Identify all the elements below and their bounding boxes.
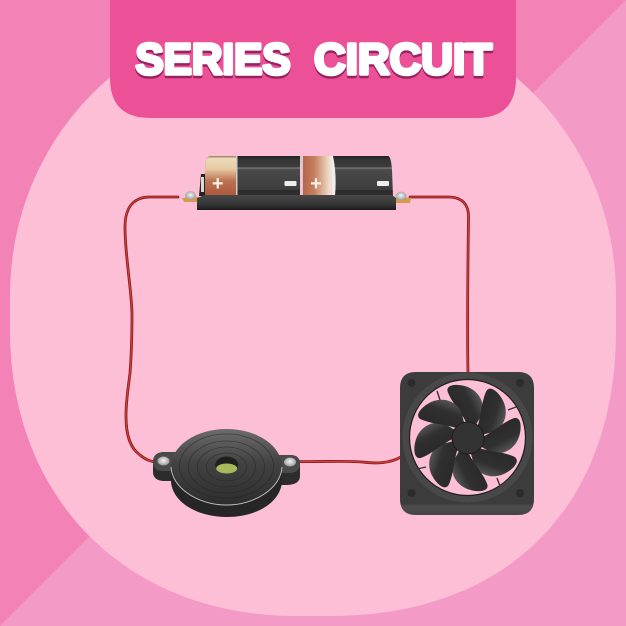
minus sign bbox=[377, 181, 389, 186]
fan frame bbox=[400, 372, 534, 515]
minus sign bbox=[284, 181, 296, 186]
buzzer left lug bbox=[153, 452, 180, 481]
buzzer hole bbox=[215, 456, 238, 474]
battery 1 bbox=[205, 156, 304, 196]
connector: right terminal bbox=[396, 192, 411, 203]
battery 2 bbox=[303, 156, 393, 196]
buzzer right lug bbox=[275, 455, 300, 485]
battery holder bbox=[182, 156, 411, 210]
title: SERIES bbox=[136, 38, 290, 86]
buzzer top bbox=[171, 429, 282, 505]
wires bbox=[125, 197, 469, 463]
fan blades bbox=[414, 385, 521, 491]
title: SERIES bbox=[136, 35, 290, 84]
holder base bbox=[197, 195, 396, 210]
connector: left terminal bbox=[182, 191, 198, 202]
plus sign: + bbox=[212, 173, 224, 195]
fan bbox=[400, 372, 534, 515]
title banner bbox=[110, 0, 516, 118]
plus sign: + bbox=[310, 173, 322, 195]
fan struts bbox=[417, 391, 516, 486]
title bbox=[136, 35, 492, 86]
title: CIRCUIT bbox=[314, 35, 492, 84]
fan hub bbox=[452, 422, 484, 454]
buzzer bbox=[153, 429, 300, 517]
title: CIRCUIT bbox=[314, 38, 492, 86]
fan opening bbox=[410, 380, 526, 496]
buzzer side bbox=[171, 470, 282, 517]
